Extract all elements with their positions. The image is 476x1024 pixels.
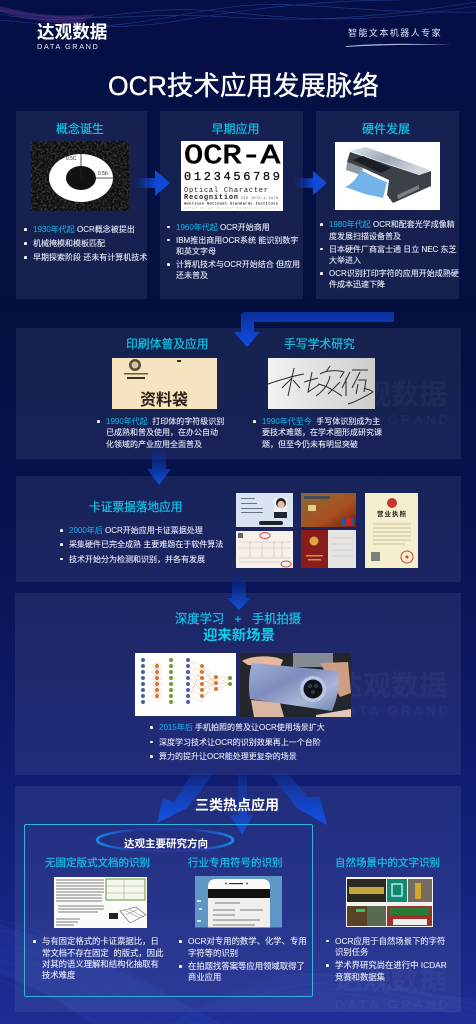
panel: hardware [316, 111, 459, 299]
bullet list [24, 224, 147, 262]
panel: print and handwriting [16, 328, 461, 459]
logo: DATA GRAND [37, 42, 99, 51]
ring highlight [96, 828, 234, 852]
bullet list: 大举进入 [329, 256, 361, 265]
bullet list: OCR识别打印字符的应用开始成熟硬 [329, 269, 459, 278]
bullet list: 1930年代起 OCR概念被提出 [33, 225, 135, 234]
watermark: DATA GRAND [335, 412, 451, 427]
watermark [335, 379, 451, 427]
arrow: concept to early [136, 170, 170, 196]
bullet list: 深度学习技术让OCR的识别效果再上一个台阶 [159, 738, 321, 747]
bullet list: 机械掩模和模板匹配 [33, 239, 105, 248]
image: OCR-A sample: Recognition [184, 194, 238, 202]
arrow: early to hardware [295, 170, 327, 196]
panel: cards and receipts [16, 476, 461, 582]
label: 达观主要研究方向 [124, 838, 208, 850]
watermark [335, 963, 447, 1013]
watermark [335, 669, 447, 719]
bullet list: 字符等的识别 [188, 948, 238, 958]
image: business license [365, 493, 418, 568]
bullet list [179, 936, 307, 982]
bullet list: OCR对专用的数学、化学、专用 [188, 936, 307, 946]
panel: concept birth [16, 111, 147, 299]
bullet list: 学术界研究尚在进行中 ICDAR [335, 960, 447, 970]
bullet list [33, 936, 164, 980]
image: OCR-A sample: ISO 1073-1:1976 [241, 196, 278, 200]
bullet list: 竞赛和数据集 [335, 972, 385, 982]
image: id card [236, 493, 293, 527]
image: donut scan [31, 141, 129, 211]
image: business license: 营业执照 [376, 508, 406, 518]
image: phone camera [240, 653, 351, 717]
heading: 早期应用 [211, 122, 260, 136]
image: phone app [195, 876, 282, 928]
panel: deep learning and phone [15, 593, 461, 775]
bullet list [150, 723, 325, 761]
arrow: hardware to print [234, 312, 394, 347]
arrows: fan to three applications [157, 773, 327, 835]
title: OCR技术应用发展脉络 [108, 71, 379, 101]
image: red certificate [301, 530, 356, 568]
arrow: print to cards [147, 450, 171, 485]
bullet list: 计算机技术与OCR开始结合 但应用 [176, 260, 300, 269]
bullet list: 1980年代起 OCR和配套光学成像精 [329, 220, 455, 229]
panel: natural scene text [326, 857, 447, 982]
heading: three hot applications: 三类热点应用 [195, 797, 279, 813]
bullet list: 识别任务 [335, 947, 368, 957]
image: OCR-A sample: 0123456789 [184, 170, 280, 184]
image: donut scan: 0.5C [66, 156, 77, 162]
heading: 概念诞生 [56, 122, 104, 136]
arrow: cards to deep learning [227, 577, 251, 610]
watermark: 达观数据 [335, 670, 447, 701]
bullet list [167, 223, 300, 280]
bullet list: 在拍题找答案等应用领域取得了 [188, 961, 305, 971]
watermark: DATA GRAND [335, 703, 451, 718]
bullet list: 1960年代起 OCR开始商用 [176, 223, 270, 232]
image: OCR-A sample: Uniform Optical Character Recognition characters [184, 206, 281, 210]
bullet list: IBM推出商用OCR系统 能识别数字 [176, 236, 298, 245]
bullet list: 算力的提升让OCR能处理更复杂的场景 [159, 752, 297, 761]
bullet list: 和英文字母 [176, 247, 216, 256]
image: OCR-A sample: Optical Character [184, 187, 268, 195]
logo: 达观数据 [37, 22, 107, 42]
panel: three hot applications [15, 786, 461, 1012]
image: OCR-A sample: American National Standards Institute [184, 202, 279, 206]
bullet list: 采集硬件已完全成熟 主要难题在于软件算法 [69, 540, 223, 549]
bullet list: 2000年后 OCR开始应用卡证票据处理 [69, 526, 203, 535]
image: neural networks [135, 653, 236, 716]
bullet list: 件成本迅速下降 [329, 280, 385, 289]
bullet list: 日本硬件厂商富士通 日立 NEC 东芝 [329, 245, 457, 254]
bullet list: handwriting: 要技术难题，在学术圈形成研究课 [262, 428, 382, 437]
bullet list [320, 220, 459, 289]
bullet list [326, 936, 447, 982]
image: donut scan: 0.5b [98, 171, 108, 177]
watermark: 达观数据 [335, 964, 447, 995]
bullet list: print: 化领域的产业应用全面普及 [106, 440, 202, 449]
image: OCR-A sample: OCR-A [184, 142, 281, 172]
bullet list: 常文档不存在固定 的版式，因此 [42, 948, 163, 958]
image: signature [268, 358, 375, 409]
callout: Datagrand research box [24, 824, 312, 997]
logo [37, 22, 107, 51]
bullet list: 与有固定格式的卡证票据比，日 [42, 936, 159, 946]
bullet list: 早期探索阶段 还未有计算机技术 [33, 253, 147, 262]
bullet list: 技术难度 [42, 970, 75, 980]
heading: 无固定版式文档的识别 [45, 857, 150, 869]
bullet list: 度发展扫描设备普及 [329, 232, 401, 241]
heading: 印刷体普及应用 [126, 337, 209, 351]
image: bank card [301, 493, 356, 527]
image: scanner [335, 142, 440, 210]
tagline [346, 28, 450, 47]
heading: 深度学习 + 手机拍摄 [175, 612, 301, 626]
bullet list: 技术开始分为检测和识别，并各有发展 [69, 555, 205, 564]
heading: 自然场景中的文字识别 [335, 857, 440, 869]
bullet list: print [97, 417, 224, 449]
bullet list [60, 526, 223, 564]
bullet list: 还未普及 [176, 271, 208, 280]
bullet list: handwriting: 题，但至今仍未有明显突破 [262, 440, 358, 449]
bullet list: print: 已成熟和普及使用，在办公自动 [106, 428, 218, 437]
image: invoice [236, 531, 293, 568]
image: document bag [112, 358, 217, 409]
image: street scenes [346, 877, 433, 927]
image: OCR-A sample [181, 141, 283, 211]
tagline: 智能文本机器人专家 [348, 28, 442, 38]
bullet list: print: 1990年代起 打印体的字符级识别 [106, 417, 224, 426]
bullet list: 对其的语义理解和结构化抽取有 [42, 959, 159, 969]
heading: 硬件发展 [362, 122, 410, 136]
heading: 手写学术研究 [284, 337, 355, 351]
bullet list: 商业应用 [188, 972, 221, 982]
watermark: DATA GRAND [335, 997, 451, 1012]
watermark: 达观数据 [335, 379, 447, 410]
heading: 卡证票据落地应用 [89, 501, 183, 514]
panel: early application [160, 111, 303, 299]
heading: 行业专用符号的识别 [188, 857, 282, 869]
image: document [54, 877, 147, 928]
bullet list: handwriting [253, 417, 382, 449]
bullet list: OCR应用于自然场景下的字符 [335, 936, 445, 946]
bullet list: 2015年后 手机拍照的普及让OCR使用场景扩大 [159, 723, 325, 732]
bullet list: handwriting: 1990年代至今 手写体识别成为主 [262, 417, 380, 426]
heading: 迎来新场景 [203, 628, 275, 644]
